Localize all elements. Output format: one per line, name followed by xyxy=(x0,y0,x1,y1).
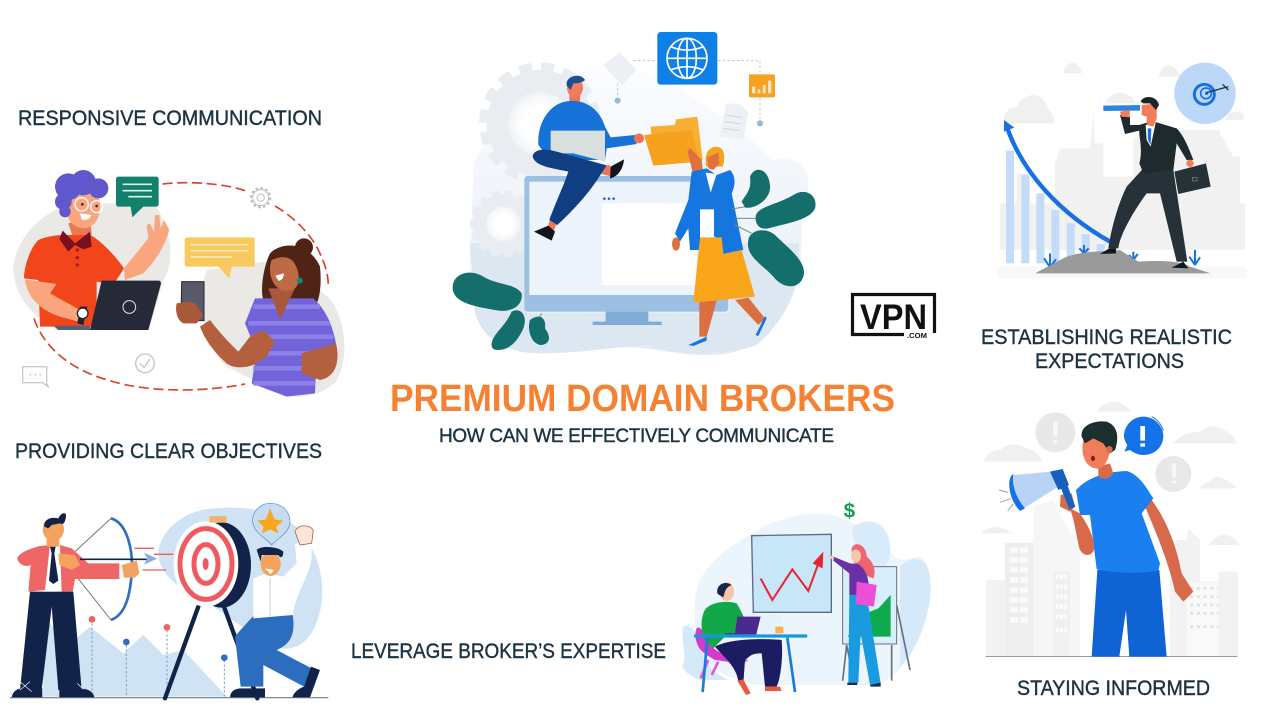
grey blob left xyxy=(13,203,170,330)
man hair xyxy=(567,76,585,90)
illustration: presenter with chart and desk xyxy=(682,499,931,695)
man smile xyxy=(80,213,92,220)
building right xyxy=(1170,528,1238,657)
man eyes xyxy=(81,203,98,207)
man legs xyxy=(533,150,607,225)
laptop xyxy=(725,617,761,636)
illustration: man with telescope and growth arrow xyxy=(997,63,1247,278)
speed arrows xyxy=(134,548,173,570)
blob accent right xyxy=(900,559,931,667)
chair xyxy=(695,627,748,663)
man collar xyxy=(59,231,92,252)
man glasses xyxy=(75,198,103,213)
woman other arm xyxy=(302,343,338,380)
shirt shading xyxy=(268,578,272,617)
woman blouse xyxy=(700,173,717,237)
cup xyxy=(775,627,783,633)
pink folder xyxy=(856,582,877,607)
briefcase xyxy=(1174,163,1211,194)
arrow tip xyxy=(144,553,157,565)
man neck xyxy=(68,217,92,243)
chair legs xyxy=(701,660,742,678)
target bull xyxy=(203,558,209,570)
globe icon xyxy=(667,38,707,78)
presenter hand xyxy=(827,555,834,559)
woman face xyxy=(270,257,299,291)
megaphone cone xyxy=(1010,472,1058,511)
shirt stripes xyxy=(248,307,333,383)
background blue blob xyxy=(158,508,322,649)
hand xyxy=(1120,110,1130,117)
arrow head xyxy=(813,552,823,568)
man ear xyxy=(1106,446,1113,453)
bow xyxy=(111,518,132,620)
folder front xyxy=(644,130,699,166)
man shirt and tie xyxy=(1146,123,1156,147)
laptop logo xyxy=(123,301,136,313)
logo suffix: .COM xyxy=(907,331,927,340)
target circle xyxy=(1174,63,1236,124)
man neck xyxy=(569,95,580,108)
node dot xyxy=(615,98,621,104)
leaves xyxy=(453,170,816,350)
grey alert bubble xyxy=(1155,456,1191,492)
label: establishing realistic expectations: ESTABLISHING REALISTIC xyxy=(981,326,1232,349)
flipchart easel xyxy=(843,605,910,681)
man head xyxy=(1142,103,1157,127)
man mouth xyxy=(1091,456,1095,461)
window dots xyxy=(603,197,615,200)
man shoes xyxy=(737,679,782,695)
woman shoes xyxy=(688,316,767,346)
exclamation mark xyxy=(1136,426,1150,447)
label: staying informed: STAYING INFORMED xyxy=(1017,677,1210,700)
man t-shirt xyxy=(1076,471,1160,573)
right block xyxy=(1187,583,1218,657)
plant stems xyxy=(537,206,760,322)
presenter shoes xyxy=(847,683,881,687)
grey alert bubble xyxy=(1035,412,1075,452)
easel legs xyxy=(165,607,257,698)
monitor body xyxy=(524,176,728,312)
paper sheet xyxy=(760,614,782,634)
laptop xyxy=(551,131,605,162)
briefcase hand xyxy=(1186,160,1194,167)
growth arrow head xyxy=(1004,120,1014,132)
telescope xyxy=(1103,105,1140,111)
rock xyxy=(1035,250,1211,273)
city skyline xyxy=(1000,113,1245,250)
illustration: archer hitting target xyxy=(10,503,328,698)
red trend arrow xyxy=(761,562,819,600)
man smile xyxy=(265,568,274,574)
man shoes xyxy=(534,159,624,241)
woman skirt xyxy=(693,237,755,303)
man head xyxy=(261,552,281,576)
grass tufts xyxy=(1044,245,1200,267)
shoe laces xyxy=(20,682,83,692)
man hair xyxy=(1141,97,1159,110)
archer legs xyxy=(20,592,82,690)
building left xyxy=(986,580,1019,657)
man trousers xyxy=(1092,570,1167,657)
man tie xyxy=(1148,128,1151,145)
mountain chart xyxy=(43,623,227,697)
gear small xyxy=(473,194,533,254)
label: providing clear objectives: PROVIDING CLEAR OBJECTIVES xyxy=(15,440,322,463)
gear large centre xyxy=(508,92,572,155)
man head xyxy=(567,78,583,98)
label: establishing realistic expectations: EXPECTATIONS xyxy=(1035,350,1184,373)
man hair xyxy=(257,547,283,562)
label: responsive communication: RESPONSIVE COMMUNICATION xyxy=(18,107,322,130)
clouds xyxy=(980,402,1239,545)
gear icon xyxy=(251,188,270,207)
illustration: two people communicating xyxy=(13,170,344,397)
man fist xyxy=(295,526,313,545)
briefcase clasp xyxy=(1192,177,1197,181)
gear small centre xyxy=(486,207,521,241)
green speech bubble xyxy=(116,177,159,217)
grey alert marks xyxy=(1055,422,1174,483)
man shirt xyxy=(24,235,124,327)
woman hair xyxy=(706,147,724,167)
growth arrow xyxy=(1007,128,1110,242)
woman face xyxy=(707,152,719,170)
hand on megaphone xyxy=(1060,493,1075,512)
dashed loop xyxy=(34,183,328,390)
man ankle xyxy=(547,165,612,233)
mid windows xyxy=(1056,577,1068,630)
target face xyxy=(174,521,238,607)
megaphone handle xyxy=(1061,485,1075,509)
woman hand xyxy=(672,237,680,251)
arrow shaft xyxy=(80,557,147,562)
man head xyxy=(719,582,734,601)
building faded xyxy=(1033,500,1080,657)
archer bow hand xyxy=(122,561,139,578)
title: PREMIUM DOMAIN BROKERS xyxy=(390,378,895,420)
shirt buttons xyxy=(76,248,79,267)
man hand xyxy=(634,133,644,143)
pin lines xyxy=(92,623,224,697)
orange chart tile xyxy=(749,74,775,97)
man jacket xyxy=(1120,115,1193,173)
target back xyxy=(192,522,251,608)
woman arm with phone xyxy=(200,320,275,367)
shoes xyxy=(1100,248,1188,268)
woman arm raised xyxy=(687,148,703,175)
right windows xyxy=(1190,588,1218,627)
woman hair xyxy=(262,246,321,303)
earring xyxy=(297,278,303,284)
man lower arm xyxy=(25,279,80,322)
ground xyxy=(10,697,328,698)
star xyxy=(257,508,283,533)
subtitle: HOW CAN WE EFFECTIVELY COMMUNICATE xyxy=(439,426,834,447)
watch xyxy=(77,307,88,325)
ground line xyxy=(986,656,1237,657)
man shirt xyxy=(253,543,312,618)
clouds xyxy=(1003,63,1243,123)
megaphone rim xyxy=(1050,469,1069,490)
sound lines xyxy=(999,490,1013,511)
blob accent left xyxy=(682,626,728,680)
flipchart green area xyxy=(848,595,891,637)
logo: VPN.com xyxy=(852,294,934,340)
lower blob shade xyxy=(470,243,799,353)
grey blob right xyxy=(202,260,344,397)
main board xyxy=(752,534,831,612)
laptop lid xyxy=(90,281,161,330)
man hair xyxy=(717,583,732,597)
presenter legs xyxy=(848,595,881,685)
man hair xyxy=(55,170,108,217)
woman neck xyxy=(268,288,295,319)
document faded xyxy=(603,52,637,85)
illustration: hero brokers exchanging folder at monitor xyxy=(453,32,816,355)
node dot xyxy=(757,120,763,126)
phone hand xyxy=(176,302,203,323)
phone xyxy=(181,282,204,321)
woman smile xyxy=(275,273,284,281)
archer jacket xyxy=(17,545,119,592)
dart xyxy=(1207,84,1228,93)
chart bars xyxy=(752,81,771,93)
blob accent top xyxy=(853,521,890,567)
screen window xyxy=(602,203,697,285)
target icon xyxy=(1194,84,1214,104)
archer hair xyxy=(44,513,66,528)
ground shadow xyxy=(997,267,1247,278)
man sweater xyxy=(702,602,753,648)
archer shirt xyxy=(43,545,58,592)
label: leverage broker's expertise: LEVERAGE BROKER’S EXPERTISE xyxy=(351,640,666,663)
archer neck and head xyxy=(43,518,64,547)
flipchart board xyxy=(843,567,897,644)
archer shoes xyxy=(12,688,94,697)
target rings xyxy=(180,529,232,599)
man far arm xyxy=(1145,500,1193,602)
yellow bubble lines xyxy=(191,245,248,257)
man legs kneeling xyxy=(235,615,312,687)
blue speech bubble xyxy=(1124,417,1163,455)
paper doc xyxy=(719,103,748,140)
man shoes xyxy=(230,667,320,697)
man near arm xyxy=(1070,508,1094,555)
presenter hair xyxy=(852,544,875,578)
monitor screen xyxy=(529,182,728,295)
archer tie xyxy=(49,547,58,584)
globe tile xyxy=(657,32,717,85)
pins xyxy=(89,616,228,661)
presenter face xyxy=(851,549,861,563)
man raised arm xyxy=(124,215,169,280)
archer draw hand xyxy=(58,553,80,570)
building windows xyxy=(1005,543,1033,657)
label: establishing realistic expectations xyxy=(981,326,1232,373)
chat icon xyxy=(23,367,49,387)
woman torso xyxy=(245,298,336,397)
man sweater xyxy=(538,101,637,160)
background blob xyxy=(470,67,808,355)
man head xyxy=(1082,433,1110,469)
monitor stand xyxy=(593,312,662,325)
building mid xyxy=(1053,572,1070,657)
bow string xyxy=(73,518,111,620)
desk top xyxy=(694,634,807,638)
gear large xyxy=(485,68,595,178)
bubble arc xyxy=(1152,417,1163,431)
megaphone bell xyxy=(1009,474,1025,511)
illustration: man with megaphone xyxy=(980,402,1239,657)
man face xyxy=(65,192,100,228)
presenter top xyxy=(833,557,869,595)
paper lines xyxy=(723,115,742,131)
man legs xyxy=(1108,168,1187,262)
man hair xyxy=(1082,421,1117,453)
logo wordmark: VPN xyxy=(860,298,927,337)
connector lines xyxy=(618,61,760,120)
woman jacket xyxy=(675,168,743,254)
yellow speech bubble xyxy=(185,237,255,278)
window grid xyxy=(1010,550,1029,620)
man neck xyxy=(1098,463,1113,479)
man legs xyxy=(715,639,782,687)
hair bun xyxy=(295,238,313,256)
star badge xyxy=(253,503,290,545)
logo frame xyxy=(852,294,934,334)
target tag xyxy=(209,516,227,523)
growth bars xyxy=(1006,151,1105,263)
background blob xyxy=(695,514,930,685)
laptop base xyxy=(53,326,90,330)
woman legs xyxy=(699,298,765,337)
green bubble lines xyxy=(123,184,152,197)
dollar sign: $ xyxy=(844,499,856,522)
check icon xyxy=(136,354,154,373)
desk legs xyxy=(703,638,795,692)
folder back xyxy=(651,117,703,163)
